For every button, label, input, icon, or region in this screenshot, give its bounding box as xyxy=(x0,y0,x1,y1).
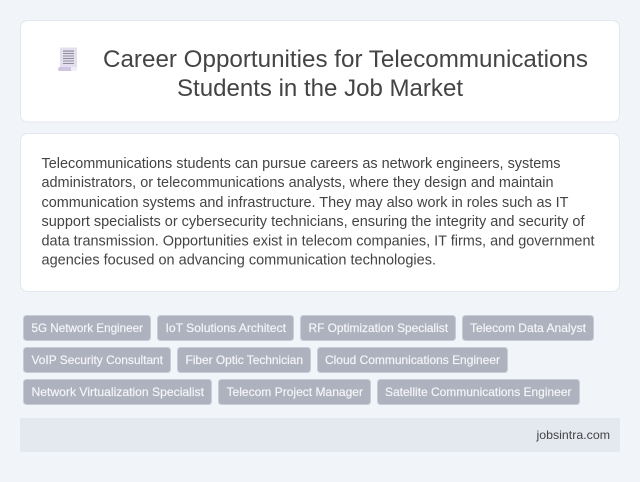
tag: Cloud Communications Engineer xyxy=(318,348,508,372)
tag: Satellite Communications Engineer xyxy=(378,380,580,404)
text block: description: support specialists or cybersecurity technicians, ensuring the integrity and security of xyxy=(42,214,586,230)
tag: VoIP Security Consultant xyxy=(24,348,170,372)
tag: RF Optimization Specialist: RF Optimization Specialist xyxy=(308,321,449,335)
text block: description: Telecommunications students can pursue careers as network engineers, systems xyxy=(42,156,560,172)
title: Career Opportunities for Telecommunications xyxy=(103,46,588,73)
title: Students in the Job Market xyxy=(177,75,463,102)
tag: Fiber Optic Technician: Fiber Optic Technician xyxy=(186,353,303,367)
tag: 5G Network Engineer xyxy=(24,316,150,340)
footer text: source: jobsintra.com xyxy=(535,428,610,442)
tag: Network Virtualization Specialist xyxy=(24,380,212,404)
tag: VoIP Security Consultant: VoIP Security Consultant xyxy=(32,353,164,367)
panel: description xyxy=(20,134,620,292)
tag: Telecom Data Analyst: Telecom Data Analyst xyxy=(470,321,587,335)
text block: description: communication systems and infrastructure. They may also work in roles such as IT xyxy=(42,195,569,211)
tag: 5G Network Engineer: 5G Network Engineer xyxy=(32,321,143,335)
tag list: job titles xyxy=(24,316,594,404)
panel: header xyxy=(20,20,620,122)
tag: IoT Solutions Architect xyxy=(158,316,294,340)
icon: document scroll xyxy=(58,48,77,71)
tag: Telecom Project Manager: Telecom Project Manager xyxy=(226,385,363,399)
text block: description: agencies focused on advancing communication technologies. xyxy=(42,252,436,268)
footer bar xyxy=(20,418,620,452)
tag: RF Optimization Specialist xyxy=(300,316,456,340)
text block: description: administrators, or telecommunications analysts, where they design and maintain xyxy=(42,175,554,191)
tag: Network Virtualization Specialist: Network Virtualization Specialist xyxy=(32,385,205,399)
tag: Cloud Communications Engineer: Cloud Communications Engineer xyxy=(325,353,500,367)
text block: description: data transmission. Opportunities exist in telecom companies, IT firms, and government xyxy=(42,234,594,250)
tag: Telecom Project Manager xyxy=(218,380,370,404)
tag: Satellite Communications Engineer: Satellite Communications Engineer xyxy=(385,385,572,399)
tag: Telecom Data Analyst xyxy=(462,316,594,340)
tag: Fiber Optic Technician xyxy=(178,348,310,372)
tag: IoT Solutions Architect: IoT Solutions Architect xyxy=(166,321,287,335)
